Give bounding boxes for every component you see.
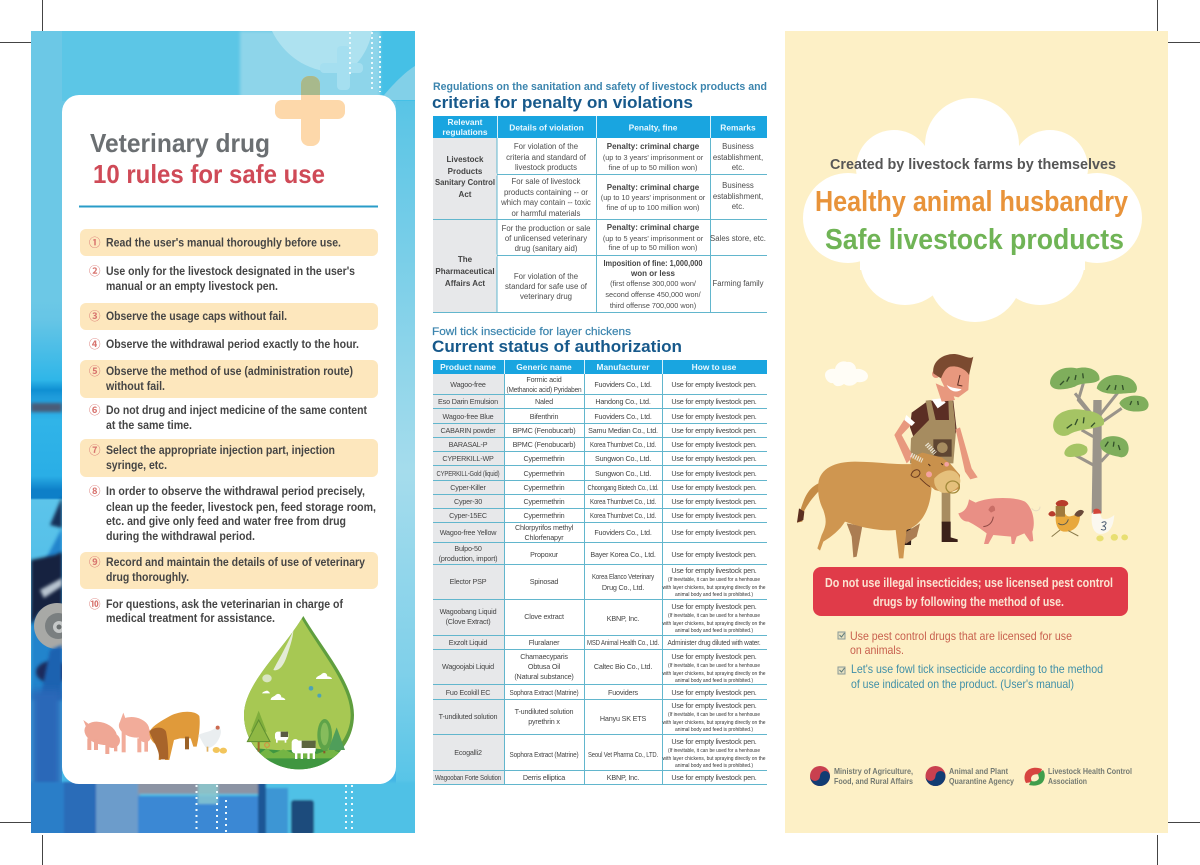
table: penalty regulations: livestock products bbox=[515, 163, 577, 172]
row: Eso Darin: Naled bbox=[535, 397, 553, 406]
row: Wagoo-free Blue: Wagoo-free Blue bbox=[443, 412, 494, 421]
row: Ecogalli2: Seoul Vet Pharma Co., LTD. bbox=[588, 750, 658, 759]
row: Elector PSP: Use for empty livestock pen. bbox=[671, 566, 757, 575]
row: Ecogalli2 bbox=[454, 737, 766, 769]
rule 6: Do not drug and inject medicine of the same content bbox=[106, 405, 367, 417]
row: Ecogalli2: Use for empty livestock pen. bbox=[671, 737, 757, 746]
table: penalty regulations: The bbox=[458, 255, 473, 264]
table: penalty regulations: Products bbox=[448, 167, 483, 176]
row: Wagoo-free: Wagoo-free bbox=[450, 380, 486, 389]
rule 6 bbox=[89, 402, 367, 432]
rule 4: ④ bbox=[89, 336, 101, 352]
logo: livestock health: Association bbox=[1048, 776, 1087, 786]
illustration: farm scene bbox=[797, 354, 1149, 558]
row: Wagoo-free: Use for empty livestock pen. bbox=[671, 380, 757, 389]
rule 8: clean up the feeder, livestock pen, feed storage room, bbox=[106, 502, 376, 514]
row: T-undiluted: (If inevitable, it can be used for a henhouse bbox=[668, 712, 760, 718]
row: Wagoo-free Blue: Fuoviders Co., Ltd. bbox=[594, 412, 652, 421]
row: Cyper-15EC: Cypermethrin bbox=[524, 511, 565, 520]
subtitle: Created by livestock farms by themselves bbox=[830, 157, 1116, 173]
table: penalty regulations: For violation of the bbox=[514, 142, 578, 151]
table: authorized products bbox=[433, 360, 767, 785]
table: penalty regulations: etc. bbox=[732, 163, 744, 172]
row: Fuo Ecokill: Fuo Ecokill EC bbox=[446, 688, 490, 697]
rule 7: ⑦ bbox=[89, 442, 101, 458]
row: Cyper-30: Use for empty livestock pen. bbox=[671, 497, 757, 506]
row: Wagoo-free Yellow: Fuoviders Co., Ltd. bbox=[594, 528, 652, 537]
row: Wagooban: Use for empty livestock pen. bbox=[671, 773, 757, 782]
orange hen bbox=[1048, 500, 1084, 537]
rule 4 bbox=[89, 336, 359, 352]
table: penalty regulations: Remarks bbox=[720, 122, 756, 132]
panel: left blue background bbox=[29, 31, 416, 835]
row: Cyper-Killer: Use for empty livestock pen. bbox=[671, 483, 757, 492]
farmer bbox=[894, 354, 978, 545]
rule 9: Record and maintain the details of use of veterinary bbox=[106, 557, 366, 569]
logo: quarantine agency bbox=[926, 766, 1014, 786]
rule 9 bbox=[80, 552, 378, 589]
rule 8: during the withdrawal period. bbox=[106, 531, 255, 543]
row: Cyper-30 bbox=[454, 497, 757, 506]
row: CYPERKILL-Gold: Cypermethrin bbox=[524, 469, 565, 478]
row: Cyper-15EC bbox=[449, 511, 757, 520]
checklist item: licensed drugs: on animals. bbox=[850, 643, 904, 657]
table: penalty regulations: establishment, bbox=[713, 153, 763, 162]
rule 2: manual or an empty livestock pen. bbox=[106, 281, 278, 293]
table: authorized products: Generic name bbox=[516, 362, 572, 372]
table: penalty regulations: Affairs Act bbox=[445, 279, 485, 288]
rule 8: etc. and give only feed and water free from drug bbox=[106, 516, 346, 528]
rule 10: medical treatment for assistance. bbox=[106, 613, 275, 625]
table: penalty regulations: (up to 5 years' imprisonment or bbox=[603, 234, 704, 243]
row: CYPERKILL-Gold: CYPERKILL-Gold (liquid) bbox=[436, 469, 500, 478]
rule 5: Observe the method of use (administration route) bbox=[106, 366, 353, 378]
row: Elector PSP: Spinosad bbox=[530, 577, 558, 586]
panel: regulations table section bbox=[432, 81, 767, 312]
row: Ecogalli2: Sophora Extract (Matrine) bbox=[510, 750, 578, 759]
rule 6: at the same time. bbox=[106, 420, 192, 432]
table: penalty regulations: For violation of the bbox=[514, 272, 578, 281]
cow bbox=[149, 712, 200, 760]
pig 2 bbox=[117, 713, 152, 752]
row: T-undiluted: animal body and feed is prohibited.) bbox=[675, 727, 753, 733]
row: Bulpo-50 bbox=[439, 544, 757, 563]
icon: orange cross bbox=[275, 76, 345, 146]
row: Wagoobang: with layer chickens, but spraying directly on the bbox=[662, 621, 766, 627]
row: Elector PSP: animal body and feed is prohibited.) bbox=[675, 592, 753, 598]
row: Wagoobang: Clove extract bbox=[524, 612, 564, 621]
row: Exzolt bbox=[449, 638, 761, 647]
row: Cyper-Killer: Cypermethrin bbox=[524, 483, 565, 492]
rule 8: ⑧ bbox=[89, 483, 101, 499]
table: penalty regulations: Livestock bbox=[447, 155, 484, 164]
row: CABARIN: Use for empty livestock pen. bbox=[671, 426, 757, 435]
bottom band bbox=[29, 782, 416, 835]
rule 5: ⑤ bbox=[89, 363, 101, 379]
checklist item: method of use: of use indicated on the product. (User's manual) bbox=[851, 677, 1074, 691]
row: T-undiluted: Use for empty livestock pen. bbox=[671, 701, 757, 710]
row: Wagoojabi: with layer chickens, but spraying directly on the bbox=[662, 671, 766, 677]
row: Wagoo-free Blue bbox=[443, 412, 757, 421]
table: penalty regulations: For sale of livestock bbox=[512, 177, 581, 186]
row: Exzolt: Administer drug diluted with water. bbox=[668, 638, 761, 647]
table: penalty regulations: regulations bbox=[442, 127, 488, 137]
rule 3: ③ bbox=[89, 308, 101, 324]
row: Ecogalli2: animal body and feed is prohibited.) bbox=[675, 763, 753, 769]
row: Exzolt: MSD Animal Health Co., Ltd. bbox=[587, 638, 659, 647]
rule 2: ② bbox=[89, 263, 101, 279]
rule 10 bbox=[89, 596, 343, 625]
row: CYPERKILL-WP: CYPERKILL-WP bbox=[442, 454, 494, 463]
table: penalty regulations: Pharmaceutical bbox=[435, 267, 495, 276]
row: Wagoo-free: (Methanoic acid) Pyridaben bbox=[506, 385, 582, 394]
row: Wagoo-free: Fuoviders Co., Ltd. bbox=[594, 380, 652, 389]
row: CYPERKILL-Gold bbox=[436, 469, 757, 478]
panel: right cover bbox=[785, 31, 1168, 833]
row: Wagoo-free Yellow: Chlorpyrifos methyl bbox=[515, 523, 574, 532]
rule 7: syringe, etc. bbox=[106, 460, 167, 472]
row: Wagoobang: (If inevitable, it can be used for a henhouse bbox=[668, 613, 760, 619]
table: penalty regulations: standard for safe use of bbox=[505, 282, 588, 291]
table: penalty regulations: Business bbox=[722, 181, 754, 190]
row: Eso Darin bbox=[438, 397, 757, 406]
logo: livestock health: Livestock Health Control bbox=[1048, 766, 1132, 776]
table: penalty regulations: fine of up to 50 million won) bbox=[609, 163, 697, 172]
row: Elector PSP: Korea Elanco Veterinary bbox=[592, 572, 654, 581]
row: Wagoobang bbox=[440, 602, 766, 634]
row: CYPERKILL-Gold: Sungwon Co., Ltd. bbox=[595, 469, 651, 478]
table: penalty regulations: Penalty: criminal charge bbox=[607, 223, 700, 232]
heading: veterinary drug: Veterinary drug bbox=[90, 128, 270, 158]
table: penalty regulations: drug (sanitary aid) bbox=[515, 244, 578, 253]
table: penalty regulations: (first offense 300,000 won/ bbox=[610, 279, 697, 288]
row: Wagooban: KBNP, Inc. bbox=[607, 773, 639, 782]
callout: red warning bbox=[813, 567, 1128, 616]
pig bbox=[958, 498, 1040, 544]
hen bbox=[198, 726, 221, 752]
pig 1 bbox=[81, 718, 120, 754]
table: penalty regulations: Penalty: criminal charge bbox=[607, 183, 700, 192]
row: Wagoojabi bbox=[442, 652, 766, 684]
table: penalty regulations: Penalty: criminal charge bbox=[607, 142, 700, 151]
row: Elector PSP: with layer chickens, but spraying directly on the bbox=[662, 585, 766, 591]
row: Wagoojabi: Use for empty livestock pen. bbox=[671, 652, 757, 661]
callout: red warning: Do not use illegal insecticides; use licensed pest control bbox=[825, 576, 1113, 590]
table: penalty regulations: which may contain -- toxic bbox=[500, 198, 591, 207]
row: Wagoo-free Yellow: Wagoo-free Yellow bbox=[440, 528, 497, 537]
row: Cyper-30: Korea Thumbvet Co., Ltd. bbox=[590, 497, 656, 506]
row: Bulpo-50: (production, import) bbox=[439, 554, 497, 563]
row: Wagoo-free Yellow bbox=[440, 523, 757, 542]
row: Wagoojabi: Wagoojabi Liquid bbox=[442, 662, 494, 671]
rule 9: ⑨ bbox=[89, 554, 101, 570]
table: penalty regulations: won or less bbox=[630, 269, 676, 278]
row: Fuo Ecokill: Use for empty livestock pen. bbox=[671, 688, 757, 697]
rule 9: drug thoroughly. bbox=[106, 572, 189, 584]
row: Wagoo-free Blue: Use for empty livestock pen. bbox=[671, 412, 757, 421]
table: penalty regulations: Penalty, fine bbox=[629, 122, 678, 132]
heading: 10 rules: 10 rules for safe use bbox=[93, 159, 325, 189]
table: penalty regulations: Imposition of fine: 1,000,000 bbox=[604, 259, 703, 268]
rule 1 bbox=[80, 229, 378, 256]
panel: authorization table section bbox=[432, 326, 767, 785]
row: CABARIN: CABARIN powder bbox=[440, 426, 496, 435]
row: Elector PSP: Elector PSP bbox=[450, 577, 487, 586]
table: penalty regulations: Relevant bbox=[448, 117, 483, 127]
table: penalty regulations: fine of up to 100 million won) bbox=[607, 203, 699, 212]
logo: ministry: Food, and Rural Affairs bbox=[834, 776, 913, 786]
row: Wagoo-free Yellow: Chlorfenapyr bbox=[524, 533, 564, 542]
table: penalty regulations: or harmful materials bbox=[512, 209, 581, 218]
table: penalty regulations: (up to 3 years' imprisonment or bbox=[603, 153, 704, 162]
row: Wagoojabi: Caltec Bio Co., Ltd. bbox=[594, 662, 652, 671]
table: penalty regulations: third offense 700,000 won) bbox=[610, 301, 696, 310]
row: Elector PSP: (If inevitable, it can be used for a henhouse bbox=[668, 577, 760, 583]
row: Wagoojabi: (Natural substance) bbox=[514, 672, 574, 681]
row: Ecogalli2: Ecogalli2 bbox=[454, 748, 482, 757]
row: BARASAL-P: Korea Thumbvet Co., Ltd. bbox=[590, 440, 656, 449]
panel: rules card bbox=[62, 76, 396, 784]
row: Wagoobang: Wagoobang Liquid bbox=[440, 607, 497, 616]
table: penalty regulations: Act bbox=[459, 190, 472, 199]
table: penalty regulations: For the production or sale bbox=[502, 224, 590, 233]
row: CYPERKILL-WP: Use for empty livestock pen. bbox=[671, 454, 757, 463]
cow bbox=[797, 444, 960, 558]
row: Wagoobang: Use for empty livestock pen. bbox=[671, 602, 757, 611]
table: authorized products: How to use bbox=[692, 362, 737, 372]
checklist item: method of use bbox=[838, 662, 1103, 691]
rule 2 bbox=[89, 263, 355, 293]
row: Exzolt: Fluralaner bbox=[529, 638, 560, 647]
row: Eso Darin: Use for empty livestock pen. bbox=[671, 397, 757, 406]
row: Ecogalli2: with layer chickens, but spraying directly on the bbox=[662, 756, 766, 762]
row: Wagoojabi: Chamaecyparis bbox=[520, 652, 568, 661]
row: CABARIN: BPMC (Fenobucarb) bbox=[513, 426, 575, 435]
row: CABARIN bbox=[440, 426, 757, 435]
row: Eso Darin: Eso Darin Emulsion bbox=[438, 397, 498, 406]
row: Wagoobang: animal body and feed is prohibited.) bbox=[675, 628, 753, 634]
table: penalty regulations: Business bbox=[722, 142, 754, 151]
table: penalty regulations: of unlicensed veterinary bbox=[505, 234, 587, 243]
table: penalty regulations: Details of violation bbox=[509, 122, 584, 132]
row: T-undiluted: pyrethrin x bbox=[528, 717, 560, 726]
heading: criteria for penalty: criteria for penalty on violations bbox=[432, 93, 693, 112]
illustration: farm animals group bbox=[81, 712, 227, 760]
table: penalty regulations: establishment, bbox=[713, 192, 763, 201]
row: Wagoojabi: (If inevitable, it can be used for a henhouse bbox=[668, 663, 760, 669]
table: authorized products: Manufacturer bbox=[596, 362, 650, 372]
table: penalty regulations: Sales store, etc. bbox=[710, 234, 766, 243]
row: BARASAL-P: BARASAL-P bbox=[449, 440, 488, 449]
rule 10: ⑩ bbox=[89, 596, 101, 612]
row: Cyper-30: Cypermethrin bbox=[524, 497, 565, 506]
rule 1: ① bbox=[89, 234, 101, 250]
row: BARASAL-P bbox=[449, 440, 757, 449]
row: Wagoobang: (Clove Extract) bbox=[446, 617, 490, 626]
row: Wagoojabi: animal body and feed is prohibited.) bbox=[675, 678, 753, 684]
rule 7 bbox=[80, 439, 378, 477]
title: safe livestock products: Safe livestock products bbox=[825, 224, 1124, 256]
row: Wagooban: Wagooban Forte Solution bbox=[435, 773, 501, 782]
illustration: small cloud bbox=[825, 361, 868, 386]
row: Wagoo-free bbox=[450, 375, 757, 394]
table: penalty regulations bbox=[433, 116, 767, 312]
chicks bbox=[213, 747, 227, 754]
row: CABARIN: Samu Median Co., Ltd. bbox=[588, 426, 658, 435]
row: Cyper-30: Cyper-30 bbox=[454, 497, 482, 506]
table: penalty regulations: criteria and standard of bbox=[506, 153, 587, 162]
row: Wagoo-free Yellow: Use for empty livestock pen. bbox=[671, 528, 757, 537]
row: Bulpo-50: Bulpo-50 bbox=[454, 544, 482, 553]
row: Eso Darin: Handong Co., Ltd. bbox=[595, 397, 651, 406]
rule 3 bbox=[80, 303, 378, 330]
row: Fuo Ecokill bbox=[446, 688, 757, 697]
table: penalty regulations: veterinary drug bbox=[520, 292, 572, 301]
table: authorized products: Product name bbox=[440, 362, 496, 372]
cloud with title bbox=[803, 98, 1142, 322]
row: Ecogalli2: (If inevitable, it can be used for a henhouse bbox=[668, 748, 760, 754]
row: Wagoojabi: Obtusa Oil bbox=[528, 662, 561, 671]
row: CYPERKILL-Gold: Use for empty livestock pen. bbox=[671, 469, 757, 478]
row: Cyper-15EC: Korea Thumbvet Co., Ltd. bbox=[590, 511, 656, 520]
logo: ministry bbox=[810, 766, 913, 786]
row: CYPERKILL-WP: Cypermethrin bbox=[524, 454, 565, 463]
row: Wagoo-free: Formic acid bbox=[526, 375, 562, 384]
checklist item: method of use: Let's use fowl tick insecticide according to the method bbox=[851, 662, 1103, 676]
rule 3: Observe the usage caps without fail. bbox=[106, 311, 287, 323]
callout: red warning: drugs by following the method of use. bbox=[873, 595, 1064, 609]
row: Elector PSP: Drug Co., Ltd. bbox=[602, 583, 644, 592]
rule 4: Observe the withdrawal period exactly to the hour. bbox=[106, 339, 359, 351]
heading: fowl tick: Fowl tick insecticide for layer chickens bbox=[432, 326, 632, 338]
row: Bulpo-50: Use for empty livestock pen. bbox=[671, 550, 757, 559]
row: Cyper-Killer: Choongang Biotech Co., Ltd. bbox=[588, 483, 659, 492]
table: penalty regulations: Sanitary Control bbox=[435, 178, 495, 187]
table: penalty regulations: second offense 450,000 won/ bbox=[605, 290, 702, 299]
row: Bulpo-50: Bayer Korea Co., Ltd. bbox=[590, 550, 656, 559]
rule 8: In order to observe the withdrawal period precisely, bbox=[106, 486, 365, 498]
table: penalty regulations: etc. bbox=[732, 202, 744, 211]
heading: regulations: Regulations on the sanitation and safety of livestock products and bbox=[433, 81, 767, 93]
row: T-undiluted: with layer chickens, but spraying directly on the bbox=[662, 720, 766, 726]
row: T-undiluted: Hanyu SK ETS bbox=[600, 714, 646, 723]
row: Fuo Ecokill: Sophora Extract (Matrine) bbox=[510, 688, 578, 697]
left strip details bbox=[31, 401, 62, 784]
table: penalty regulations: (up to 10 years' imprisonment or bbox=[601, 193, 706, 202]
rule 5: without fail. bbox=[105, 381, 165, 393]
row: Cyper-Killer bbox=[450, 483, 757, 492]
row: CYPERKILL-WP: Sungwon Co., Ltd. bbox=[595, 454, 651, 463]
table: penalty regulations: products containing -- or bbox=[504, 188, 588, 197]
row: T-undiluted bbox=[439, 701, 766, 733]
rule 2: Use only for the livestock designated in the user's bbox=[106, 266, 355, 278]
row: Wagoobang: KBNP, Inc. bbox=[607, 614, 639, 623]
rule 1: Read the user's manual thoroughly before use. bbox=[106, 238, 341, 250]
row: CYPERKILL-WP bbox=[442, 454, 757, 463]
logo: livestock health bbox=[1024, 766, 1132, 786]
row: Fuo Ecokill: Fuoviders bbox=[608, 688, 639, 697]
row: Cyper-15EC: Use for empty livestock pen. bbox=[671, 511, 757, 520]
logo: quarantine agency: Animal and Plant bbox=[949, 766, 1008, 776]
rule 7: Select the appropriate injection part, injection bbox=[106, 445, 335, 457]
rule 5 bbox=[80, 360, 378, 398]
table: penalty regulations: fine of up to 50 million won) bbox=[609, 243, 697, 252]
row: Exzolt: Exzolt Liquid bbox=[449, 638, 487, 647]
white hen and chicks bbox=[1092, 509, 1128, 541]
row: Bulpo-50: Propoxur bbox=[530, 550, 559, 559]
row: BARASAL-P: Use for empty livestock pen. bbox=[671, 440, 757, 449]
title: healthy animal husbandry: Healthy animal husbandry bbox=[815, 186, 1128, 218]
rule 6: ⑥ bbox=[89, 402, 101, 418]
table: penalty regulations: Farming family bbox=[712, 279, 764, 288]
checklist item: licensed drugs bbox=[838, 629, 1072, 657]
row: Cyper-15EC: Cyper-15EC bbox=[449, 511, 487, 520]
row: Cyper-Killer: Cyper-Killer bbox=[450, 483, 486, 492]
row: BARASAL-P: BPMC (Fenobucarb) bbox=[513, 440, 575, 449]
row: T-undiluted: T-undiluted solution bbox=[439, 712, 498, 721]
row: Wagoo-free Blue: Bifenthrin bbox=[530, 412, 558, 421]
row: Elector PSP bbox=[450, 566, 766, 598]
heading: current status: Current status of authorization bbox=[432, 337, 682, 356]
checklist item: licensed drugs: Use pest control drugs that are licensed for use bbox=[850, 629, 1072, 643]
illustration: green drop landscape bbox=[243, 616, 357, 773]
row: Wagooban bbox=[435, 773, 757, 782]
row: Wagooban: Derris elliptica bbox=[523, 773, 565, 782]
tree bbox=[1050, 367, 1149, 513]
rule 10: For questions, ask the veterinarian in charge of bbox=[106, 599, 343, 611]
row: T-undiluted: T-undiluted solution bbox=[515, 707, 574, 716]
logo: quarantine agency: Quarantine Agency bbox=[949, 776, 1014, 786]
rule 8 bbox=[89, 483, 376, 543]
logo: ministry: Ministry of Agriculture, bbox=[834, 766, 913, 776]
